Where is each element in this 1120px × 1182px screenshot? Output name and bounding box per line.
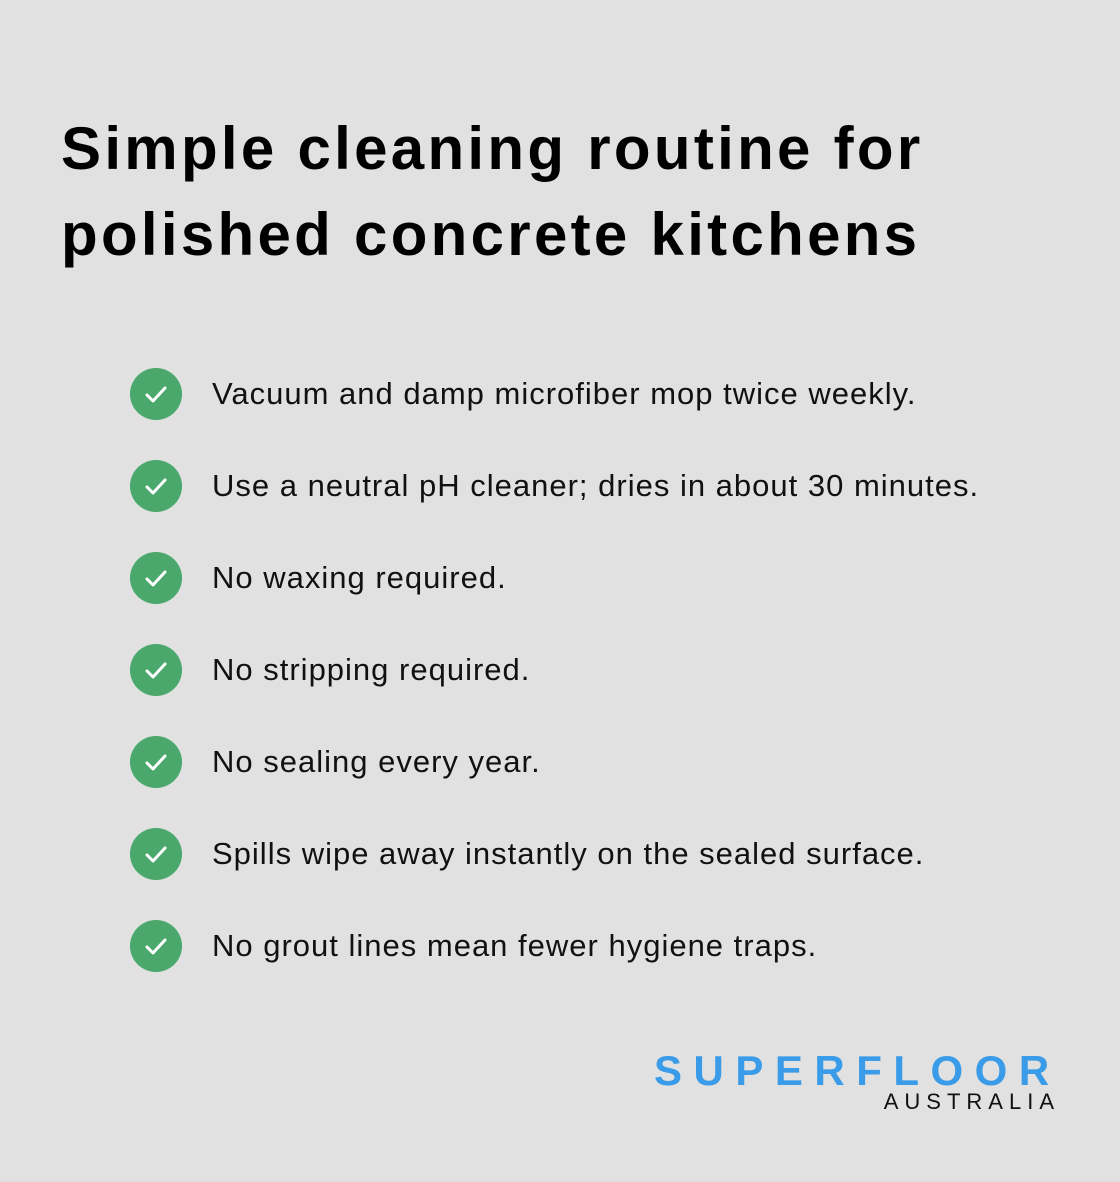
item 4 (130, 644, 530, 696)
item 2 (130, 460, 979, 512)
title (61, 115, 924, 268)
item 3: No waxing required. (212, 560, 507, 595)
item 1: Vacuum and damp microfiber mop twice weekly. (212, 376, 916, 411)
item 6: Spills wipe away instantly on the sealed surface. (212, 836, 924, 871)
item 3 (130, 552, 507, 604)
item 4: No stripping required. (212, 652, 530, 687)
item 1 (130, 368, 916, 420)
logo: SUPERFLOOR (654, 1047, 1061, 1094)
title: polished concrete kitchens (61, 201, 920, 268)
item 2: Use a neutral pH cleaner; dries in about 30 minutes. (212, 468, 979, 503)
item 7 (130, 920, 817, 972)
logo: AUSTRALIA (884, 1089, 1060, 1114)
title: Simple cleaning routine for (61, 115, 924, 182)
item 5 (130, 736, 541, 788)
list: cleaning steps (130, 368, 979, 972)
item 7: No grout lines mean fewer hygiene traps. (212, 928, 817, 963)
item 6 (130, 828, 924, 880)
item 5: No sealing every year. (212, 744, 541, 779)
